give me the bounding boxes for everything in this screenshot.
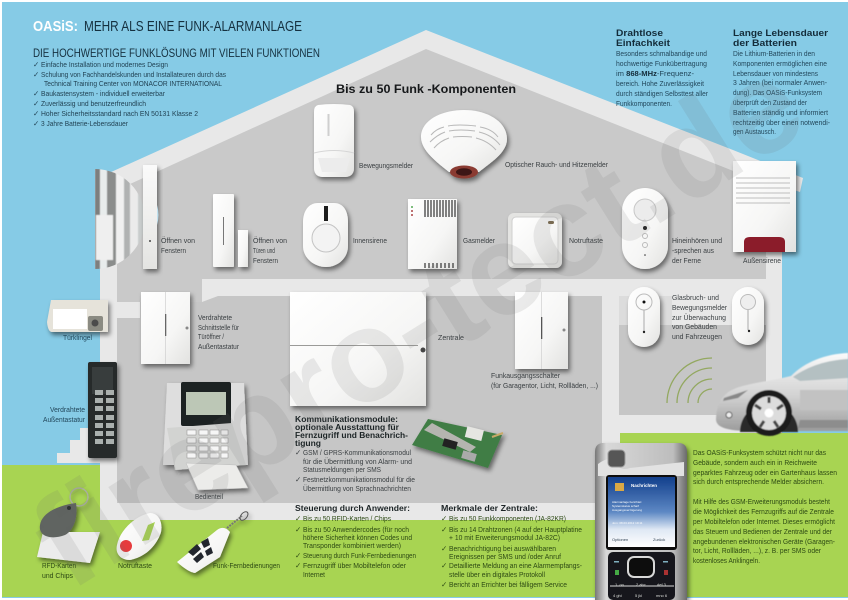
text block: Lange Lebensdauer der Batterien: Lange Lebensdauer xyxy=(733,28,829,38)
text block: feature list: Baukastensystem - individuell erweiterbar xyxy=(41,89,165,98)
text block: Kommunikationsmodule: Statusmeldungen per SMS xyxy=(303,465,381,474)
text block: Lange Lebensdauer der Batterien: Komponenten ermöglichen eine xyxy=(733,59,827,68)
text block: Steuerung durch Anwender: höhere Sicherheit können Codes und xyxy=(303,533,412,542)
label: Verdrahtete Außentastatur: Verdrahtete xyxy=(50,405,85,414)
text block: Steuerung durch Anwender: Steuerung durch Funk-Fernbedienungen xyxy=(303,551,416,560)
icon: mobile phone: Jom: 08.03.2012 19:11 xyxy=(612,521,643,525)
text block: Kommunikationsmodule: ✓ xyxy=(295,448,301,457)
icon: panic button remote xyxy=(117,513,162,560)
label: Funkausgangsschalter: Funkausgangsschalter xyxy=(491,371,560,380)
title: MEHR ALS EINE FUNK-ALARMANLAGE xyxy=(84,18,302,35)
text block: Drahtlose Einfachkeit: Einfachkeit xyxy=(616,38,670,48)
text block: vehicle and GSM description xyxy=(693,448,837,565)
icon: emergency button xyxy=(508,213,562,268)
label: Glasbruch- und Bewegungsmelder: Glasbruch- und xyxy=(672,293,719,302)
heading: components: Bis zu 50 Funk -Komponenten xyxy=(336,84,516,96)
icon: motion sensor xyxy=(732,287,764,345)
text block: feature list: 3 Jahre Batterie-Lebensdauer xyxy=(41,119,128,128)
text block: Lange Lebensdauer der Batterien: Die Lithium-Batterien in den xyxy=(733,49,815,58)
text block: vehicle and GSM description: kostenloses Anklingeln. xyxy=(693,556,760,565)
text block: Drahtlose Einfachkeit xyxy=(616,28,708,108)
icon: mobile phone: mno 6 xyxy=(656,593,668,598)
text block: feature list: ✓ xyxy=(33,119,39,128)
text block: feature list: ✓ xyxy=(33,89,39,98)
icon: mobile phone: def 3 xyxy=(657,582,667,587)
icon: car xyxy=(716,353,848,436)
text block: Kommunikationsmodule: optionale Ausstattung für xyxy=(295,423,399,432)
text block: Kommunikationsmodule: für die Übermittlung von Alarm- und xyxy=(303,457,412,466)
label: Glasbruch- und Bewegungsmelder: von Gebäuden xyxy=(672,322,717,331)
title xyxy=(33,18,302,35)
text block: Merkmale der Zentrale: stelle über ein digitales Protokoll xyxy=(449,570,545,579)
text block: Drahtlose Einfachkeit: hochwertige Funkübertragung xyxy=(616,59,707,68)
text block: Lange Lebensdauer der Batterien: gen Austausch. xyxy=(733,127,776,136)
icon: window photo with sensor xyxy=(90,165,158,275)
text block: Steuerung durch Anwender: ✓ xyxy=(295,525,301,534)
icon: indoor siren xyxy=(303,203,348,267)
right room xyxy=(619,325,766,415)
text block: Steuerung durch Anwender: ✓ xyxy=(295,514,301,523)
icon: key fob remote xyxy=(177,510,250,573)
label: Öffnen von Türen und Fenstern xyxy=(253,236,287,265)
text block: Merkmale der Zentrale: ✓ xyxy=(441,514,447,523)
icon: control keypad xyxy=(163,382,248,490)
text block: Drahtlose Einfachkeit: bereich. Hohe Zuverlässigkeit xyxy=(616,79,705,88)
text block: Merkmale der Zentrale: Detaillierte Meldung an eine Alarmempfangs- xyxy=(449,561,582,570)
icon: outdoor siren xyxy=(733,161,796,252)
text block: Drahtlose Einfachkeit: Besonders schmalbandige und xyxy=(616,49,707,58)
label: Funkausgangsschalter: (für Garagentor, Licht, Rollläden, ...) xyxy=(491,381,598,390)
icon: mobile phone: 5 jkl xyxy=(635,593,642,598)
text block: Lange Lebensdauer der Batterien xyxy=(733,28,830,136)
icon: mobile phone: 4 ghi xyxy=(613,593,622,598)
text block: Drahtlose Einfachkeit: Drahtlose xyxy=(616,28,663,38)
icon: mobile phone: Optionen xyxy=(612,537,628,542)
label: RFD-Karten und Chips: RFD-Karten xyxy=(42,561,76,570)
label: Verdrahtete Schnittstelle xyxy=(198,313,239,351)
label: Notruftaste: Notruftaste xyxy=(118,561,152,570)
label: Hineinhören: -sprechen aus xyxy=(672,246,714,255)
label: Öffnen von Fenstern xyxy=(161,236,195,255)
text block: Lange Lebensdauer der Batterien: 3 Jahren (bei normaler Anwen- xyxy=(733,78,827,87)
icon: mobile phone: Ausgangsverzögerung xyxy=(612,508,642,512)
label: Hineinhören: der Ferne xyxy=(672,256,701,265)
text block: vehicle and GSM description: Gebäude, sondern auch ein in Reichweite xyxy=(693,458,817,467)
label: Öffnen von Fenstern: Öffnen von xyxy=(161,236,195,245)
label: Türklingel: Türklingel xyxy=(63,333,92,342)
text block: Merkmale der Zentrale: Bis zu 50 Funkkomponenten (JA-82KR) xyxy=(449,514,566,523)
label: Verdrahtete Außentastatur: Außentastatur xyxy=(43,415,85,424)
icon: gas detector xyxy=(408,199,457,269)
text block: Merkmale der Zentrale: ✓ xyxy=(441,580,447,589)
text block: Merkmale der Zentrale: Benachrichtigung bei auswählbaren xyxy=(449,544,556,553)
icon: motion detector xyxy=(314,104,354,177)
text block: feature list: Einfache Installation und modernes Design xyxy=(41,60,168,69)
text block: feature list: Technical Training Center von MONACOR INTERNATIONAL xyxy=(44,79,222,88)
text block: Lange Lebensdauer der Batterien: dung). Das OASiS-Funksystem xyxy=(733,88,822,97)
label: Zentrale: Zentrale xyxy=(438,333,464,342)
icon: wired interface xyxy=(141,292,190,364)
icon: control panel housing xyxy=(290,292,426,406)
icon: mobile phone: Zurück xyxy=(653,537,665,542)
text block: Steuerung durch Anwender: Fernzugriff über Mobiltelefon oder xyxy=(303,561,406,570)
icon: external keypad xyxy=(88,362,117,458)
watermark: firepro-tect.de xyxy=(7,28,827,600)
icon: communication module board xyxy=(412,419,503,468)
label: Notruftaste: Notruftaste xyxy=(569,236,603,245)
text block: Kommunikationsmodule: ✓ xyxy=(295,475,301,484)
text block: feature list: ✓ xyxy=(33,70,39,79)
text block: Merkmale der Zentrale: + 10 mit Erweiterungsmodul JA-82C) xyxy=(449,533,560,542)
label: Glasbruch- und Bewegungsmelder xyxy=(672,293,727,341)
text block: Merkmale der Zentrale: Bis zu 14 Drahtzonen (4 auf der Hauptplatine xyxy=(449,525,582,534)
text block: Steuerung durch Anwender: Internet xyxy=(303,570,326,579)
text block: Merkmale der Zentrale: Ereignissen per SMS und /oder Anruf xyxy=(449,552,562,561)
label: Außensirene: Außensirene xyxy=(743,256,781,265)
text block: Merkmale der Zentrale xyxy=(441,504,582,589)
label: Glasbruch- und Bewegungsmelder: Bewegungsmelder xyxy=(672,303,727,312)
label: RFD-Karten und Chips xyxy=(42,561,76,580)
title: OASiS: xyxy=(33,18,78,35)
text block: Lange Lebensdauer der Batterien: Batterien ständig und informiert xyxy=(733,108,829,117)
icon: glass break detector xyxy=(628,287,660,347)
text block: Merkmale der Zentrale: ✓ xyxy=(441,561,447,570)
text block: Steuerung durch Anwender: Transponder kombiniert werden) xyxy=(303,541,401,550)
text block: Lange Lebensdauer der Batterien: rechtzeitig über einen notwendi- xyxy=(733,118,830,127)
text block: Drahtlose Einfachkeit: durch ständigen Selbsttest aller xyxy=(616,89,708,98)
label: Bedienteil: Bedienteil xyxy=(195,492,223,501)
text block: Steuerung durch Anwender: ✓ xyxy=(295,551,301,560)
attic room xyxy=(117,49,766,302)
text block: Steuerung durch Anwender: ✓ xyxy=(295,561,301,570)
text block: Steuerung durch Anwender: Bis zu 50 Anwendercodes (für noch xyxy=(303,525,409,534)
text block: Kommunikationsmodule: tigung xyxy=(295,439,321,448)
text block: feature list: ✓ xyxy=(33,60,39,69)
text block: Kommunikationsmodule xyxy=(295,415,415,493)
text block: vehicle and GSM description: tor, Licht, Rollläden, ...), z. B. per SMS oder xyxy=(693,546,821,555)
label: Verdrahtete Schnittstelle: Verdrahtete xyxy=(198,313,232,322)
icon: mobile phone: 1 .oo xyxy=(615,582,625,587)
text block: feature list: ✓ xyxy=(33,109,39,118)
icon: mobile phone: 2 abc xyxy=(636,582,646,587)
icon: smoke detector xyxy=(421,110,507,178)
text block: Kommunikationsmodule: Übermittlung von Sprachnachrichten xyxy=(303,484,411,493)
icon: mobile phone xyxy=(595,443,687,600)
text block: feature list: Hoher Sicherheitsstandard nach EN 50131 Klasse 2 xyxy=(41,109,198,118)
label: Hineinhören xyxy=(672,236,722,265)
label: Verdrahtete Außentastatur xyxy=(43,405,85,424)
icon: door contact xyxy=(213,194,248,267)
label: Glasbruch- und Bewegungsmelder: und Fahrzeugen xyxy=(672,332,722,341)
text block: feature list: DIE HOCHWERTIGE FUNKLÖSUNG MIT VIELEN FUNKTIONEN xyxy=(33,46,320,60)
label: Verdrahtete Schnittstelle: Schnittstelle für xyxy=(198,323,239,332)
text block: Steuerung durch Anwender: Bis zu 50 RFID-Karten / Chips xyxy=(303,514,391,523)
text block: Steuerung durch Anwender: Steuerung durch Anwender: xyxy=(295,504,410,513)
icon: RFID card and fob xyxy=(37,488,100,563)
label: Verdrahtete Schnittstelle: Außentastatur xyxy=(198,342,239,351)
label: Innensirene: Innensirene xyxy=(353,236,387,245)
text block: Lange Lebensdauer der Batterien: der Batterien xyxy=(733,38,797,48)
ground floor room xyxy=(117,296,602,503)
house outline xyxy=(57,30,803,520)
icon: radio output switch xyxy=(515,292,568,369)
label: Gasmelder: Gasmelder xyxy=(463,236,495,245)
icon: mobile phone: Alarmanlage berichtet: xyxy=(612,500,642,504)
label: Öffnen von Türen und Fenstern: Türen und xyxy=(253,246,275,255)
icon: doorbell xyxy=(47,300,108,332)
text block: Merkmale der Zentrale: Merkmale der Zentrale: xyxy=(441,504,538,513)
text block: Drahtlose Einfachkeit: im 868-MHz-Frequenz- xyxy=(616,69,694,78)
label: Hineinhören: Hineinhören und xyxy=(672,236,722,245)
text block: Lange Lebensdauer der Batterien: Lebensdauer von mindestens xyxy=(733,69,818,78)
icon: radio waves xyxy=(667,358,712,403)
text block: Kommunikationsmodule: GSM / GPRS-Kommunikationsmodul xyxy=(303,448,411,457)
text block: vehicle and GSM description: sich durch entsprechende Melder absichern. xyxy=(693,477,824,486)
label: Glasbruch- und Bewegungsmelder: zur Überwachung xyxy=(672,313,726,322)
text block: Kommunikationsmodule: Festnetzkommunikationsmodul für die xyxy=(303,475,415,484)
label: Rauchmelder: Optischer Rauch- und Hitzemelder xyxy=(505,160,608,169)
text block: vehicle and GSM description: Mit Hilfe des GSM-Erweiterungsmoduls besteht xyxy=(693,497,831,506)
icon: listen-in device xyxy=(622,188,668,269)
label: Öffnen von Türen und Fenstern: Öffnen von xyxy=(253,236,287,245)
label: Funk-Fernbedienungen: Funk-Fernbedienungen xyxy=(213,561,280,570)
icon: mobile phone: Systemstatus scharf xyxy=(612,504,639,508)
background lawn xyxy=(2,433,848,597)
text block: feature list: Zuverlässig und benutzerfreundlich xyxy=(41,99,146,108)
text block: Kommunikationsmodule: Kommunikationsmodule: xyxy=(295,415,398,424)
label: Öffnen von Türen und Fenstern: Fenstern xyxy=(253,256,278,265)
label: Öffnen von Fenstern: Fenstern xyxy=(161,246,186,255)
text block: Merkmale der Zentrale: ✓ xyxy=(441,525,447,534)
text block: Drahtlose Einfachkeit: Funkkomponenten. xyxy=(616,99,672,108)
label: RFD-Karten und Chips: und Chips xyxy=(42,571,73,580)
label: Funkausgangsschalter xyxy=(491,371,598,390)
text block: vehicle and GSM description: Das OASiS-Funksystem schützt nicht nur das xyxy=(693,448,826,457)
text block: feature list: ✓ xyxy=(33,99,39,108)
text block: Kommunikationsmodule: Fernzugriff und Benachrich- xyxy=(295,431,408,440)
icon: mobile phone: Nachrichten xyxy=(631,483,657,488)
text block: Steuerung durch Anwender xyxy=(295,504,416,579)
text block: Merkmale der Zentrale: Bericht an Errichter bei fälligem Service xyxy=(449,580,567,589)
label: Verdrahtete Schnittstelle: Türöffner / xyxy=(198,332,225,341)
text block: feature list: Schulung von Fachhandelskunden und Installateuren durch das xyxy=(41,70,226,79)
text block: Lange Lebensdauer der Batterien: überprüft den Zustand der xyxy=(733,98,807,107)
text block: Merkmale der Zentrale: ✓ xyxy=(441,544,447,553)
label: Bewegungsmelder: Bewegungsmelder xyxy=(359,161,413,170)
text block: feature list xyxy=(33,46,320,128)
